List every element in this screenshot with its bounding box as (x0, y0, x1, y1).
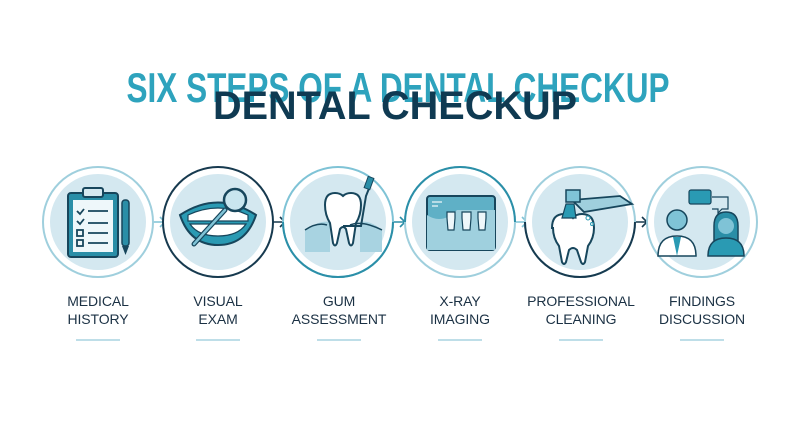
label: medical history: MEDICAL (67, 293, 129, 309)
icon: mouth with mirror (180, 189, 256, 245)
label: gum assessment: ASSESSMENT (292, 311, 387, 327)
label: gum assessment (292, 293, 387, 340)
step 4: x-ray imaging (405, 167, 515, 277)
label: visual exam: EXAM (198, 311, 238, 327)
arrow: 2 to 3 (273, 217, 285, 227)
step 2: visual exam (163, 167, 273, 277)
icon: x-ray film (427, 196, 495, 250)
label: professional cleaning: CLEANING (546, 311, 616, 327)
label: findings discussion: DISCUSSION (659, 311, 745, 327)
arrow: 3 to 4 (393, 217, 405, 227)
label: findings discussion: FINDINGS (669, 293, 735, 309)
arrow: 4 to 5 (515, 217, 527, 227)
label: x-ray imaging (430, 293, 490, 340)
label: professional cleaning: PROFESSIONAL (527, 293, 635, 309)
label: gum assessment: GUM (323, 293, 355, 309)
arrow: 5 to 6 (635, 217, 647, 227)
step 5: professional cleaning (525, 167, 635, 277)
label: visual exam: VISUAL (193, 293, 243, 309)
step 6: findings discussion (647, 167, 757, 277)
step 3: gum assessment (283, 167, 393, 277)
label: findings discussion (659, 293, 745, 340)
step 1: medical history (43, 167, 153, 277)
label: x-ray imaging: IMAGING (430, 311, 490, 327)
label: visual exam (193, 293, 243, 340)
title: DENTAL CHECKUP (213, 84, 577, 128)
title (126, 64, 670, 128)
label: x-ray imaging: X-RAY (439, 293, 481, 309)
label: medical history: HISTORY (67, 311, 129, 327)
icon: clipboard (68, 188, 129, 257)
label: professional cleaning (527, 293, 635, 340)
icon: tooth and polisher (552, 190, 632, 264)
icon: doctor and patient (658, 190, 744, 256)
icon: tooth with probe (305, 176, 382, 252)
label: medical history (67, 293, 129, 340)
arrow: 1 to 2 (153, 217, 165, 227)
